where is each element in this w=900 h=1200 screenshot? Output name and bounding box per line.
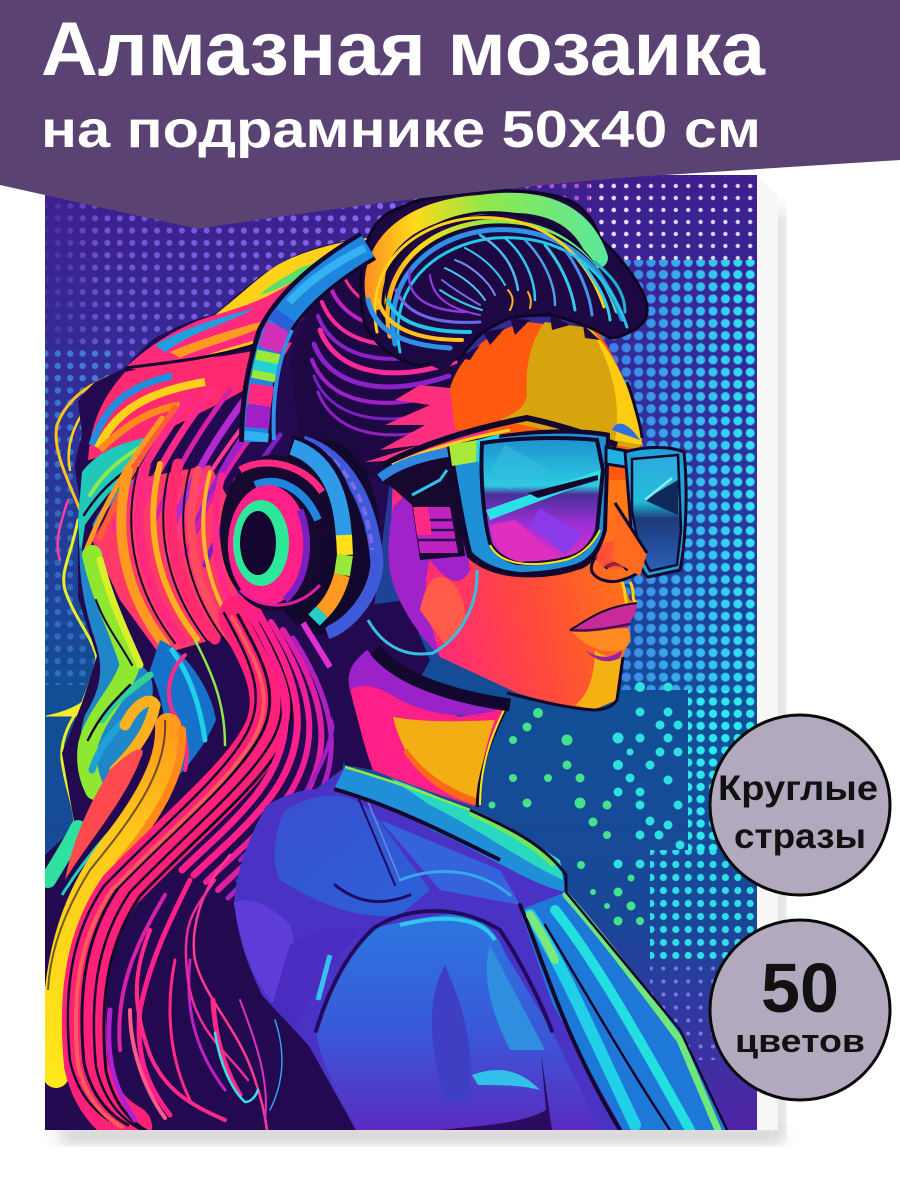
dark shadow behind neck — [325, 600, 430, 770]
nose over far lens — [612, 505, 647, 576]
lower face — [390, 470, 647, 710]
header banner — [0, 0, 900, 229]
far lens — [625, 448, 686, 577]
chin yellow — [575, 650, 623, 710]
shoulder seam lines — [316, 787, 552, 1031]
sunglasses — [378, 418, 686, 577]
nose bridge under detail — [622, 582, 637, 606]
top hair lobes — [126, 280, 306, 370]
jacket — [234, 767, 727, 1130]
headphones — [220, 246, 380, 667]
canvas side edge and shadow — [60, 175, 784, 1142]
jacket body — [234, 767, 623, 1130]
panel: painting — [45, 175, 757, 1133]
teal lobe — [78, 438, 144, 559]
forehead — [400, 322, 642, 480]
badge: round rhinestones: стразы — [734, 817, 866, 856]
badge: 50 colours: 50 — [761, 949, 839, 1027]
cable — [303, 623, 330, 667]
painting background with halftone dots — [45, 175, 757, 1130]
neck — [325, 600, 510, 807]
ear cup colored band — [290, 447, 347, 620]
lips — [574, 604, 637, 630]
fine lower strands — [109, 855, 282, 1130]
badge: round rhinestones: Круглые — [718, 769, 878, 808]
shoulder panel — [316, 914, 600, 1130]
sleeve stripes — [520, 892, 727, 1130]
hairline spikes on forehead — [430, 315, 600, 372]
chest highlights — [275, 796, 430, 916]
headband — [255, 246, 368, 442]
mid hair vertical strands — [116, 458, 241, 646]
ear cup tech ring — [264, 439, 380, 635]
ear cup ring — [233, 500, 289, 586]
orange and red lock — [65, 749, 143, 880]
badge: 50 colours — [710, 920, 890, 1100]
hair dark base — [45, 237, 420, 1130]
main lens — [481, 438, 603, 563]
pink strands near the ear — [182, 610, 335, 898]
cheek pink shape — [388, 480, 470, 657]
brow line — [383, 418, 617, 465]
jaw outline — [507, 657, 623, 710]
badge: round rhinestones — [710, 715, 890, 895]
collar — [334, 767, 566, 892]
nose — [591, 503, 647, 582]
bridge — [606, 447, 632, 468]
title: Алмазная мозаика — [41, 7, 766, 92]
mid hair colour base — [92, 465, 245, 655]
long flowing hair — [45, 237, 420, 1133]
dark hem wedge — [441, 1053, 552, 1130]
temple arm — [378, 450, 465, 560]
ear cup body — [220, 455, 326, 611]
earring — [368, 570, 477, 654]
main frame — [447, 429, 610, 577]
back of head strands — [290, 270, 467, 478]
large pink S strands — [68, 613, 292, 1133]
diagonal purple and pink strands — [87, 390, 280, 565]
yellow forehead shade — [500, 322, 640, 450]
thin loose hair strands — [46, 374, 112, 822]
pink hairline spikes — [365, 385, 490, 462]
face — [365, 322, 647, 710]
badge: 50 colours: цветов — [735, 1023, 865, 1059]
pompadour hair — [361, 191, 647, 372]
large yellow lock — [55, 726, 168, 1075]
blue and green side lock — [80, 545, 153, 795]
scattered green and cyan dots — [488, 708, 644, 926]
subtitle: на подрамнике 50х40 см — [41, 101, 761, 159]
